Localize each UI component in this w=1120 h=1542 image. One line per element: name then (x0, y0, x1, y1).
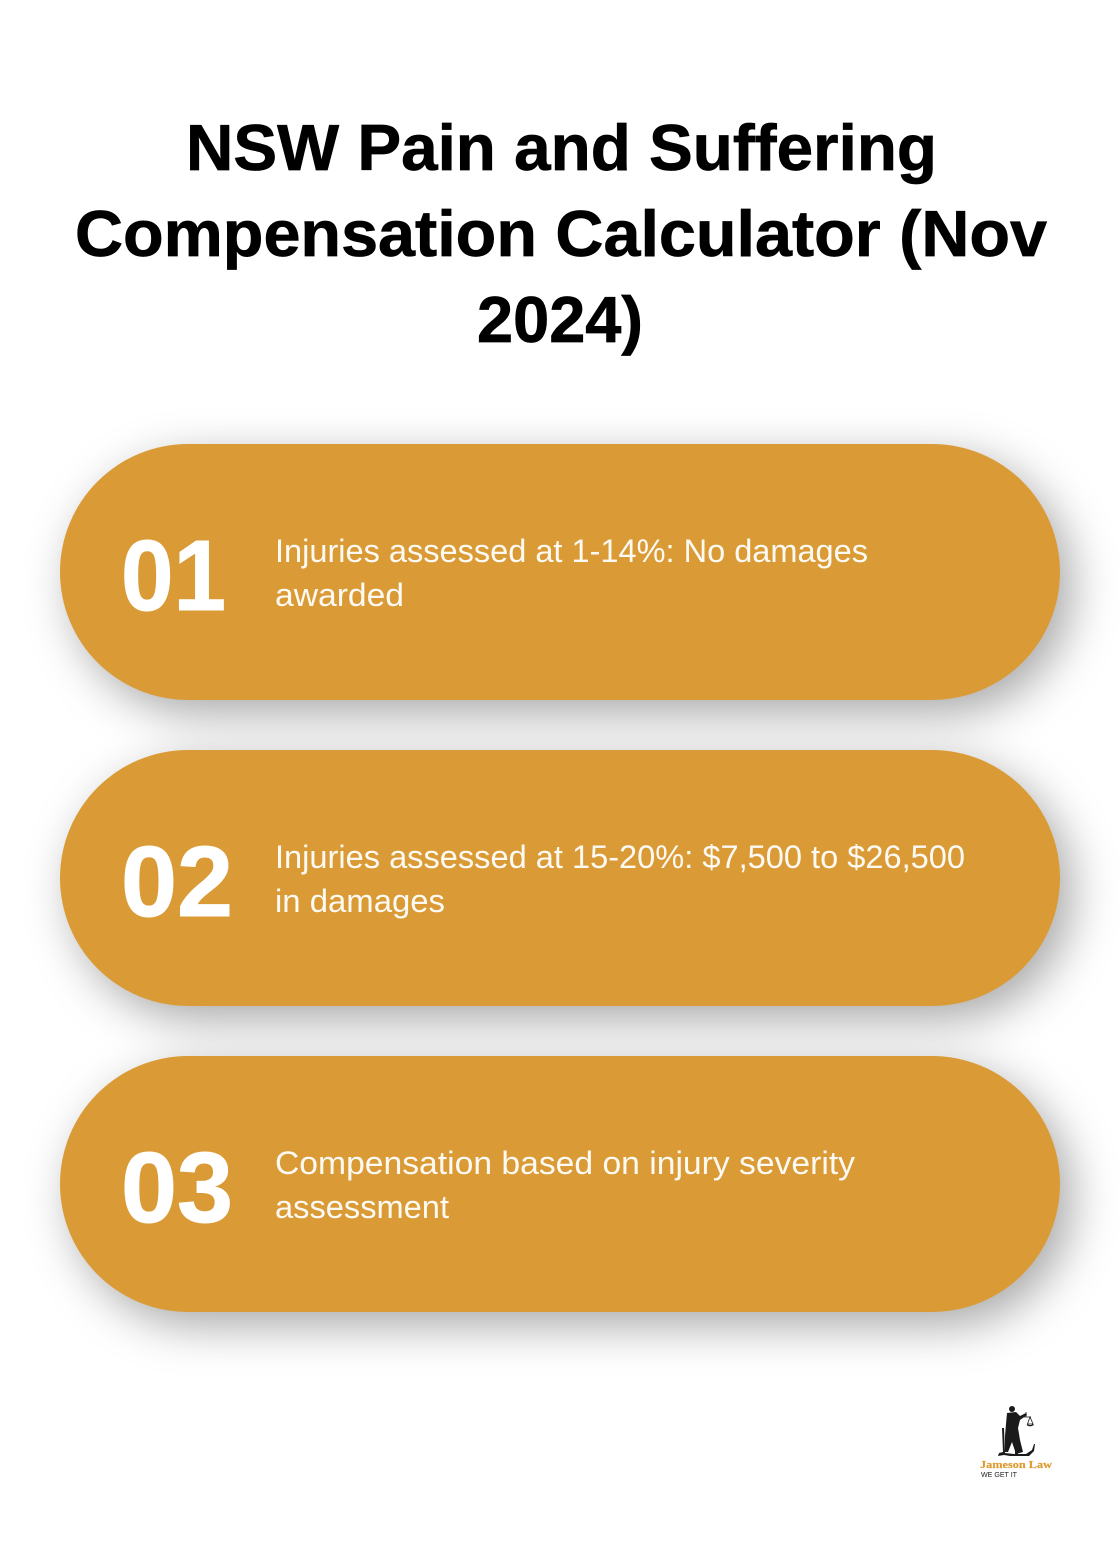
logo name: Jameson Law (980, 1459, 1052, 1471)
panel: step 3 pill (60, 1056, 1060, 1312)
step 2 number: 02 (121, 826, 233, 938)
title: 2024) (477, 283, 643, 356)
step 1 text (275, 533, 868, 613)
step 1 number: 01 (121, 520, 226, 632)
step 2 text: Injuries assessed at 15-20%: $7,500 to $26,500 (275, 839, 965, 875)
step 1 text: Injuries assessed at 1-14%: No damages (275, 533, 868, 569)
step 1 text: awarded (275, 577, 404, 613)
title: NSW Pain and Suffering (186, 111, 937, 184)
step 3 text: Compensation based on injury severity (275, 1145, 855, 1181)
step 3 text (275, 1145, 855, 1225)
icon: lady justice (998, 1406, 1035, 1456)
step 3 number: 03 (121, 1132, 233, 1244)
title (75, 111, 1047, 356)
panel: step 1 pill (60, 444, 1060, 700)
step 2 text: in damages (275, 883, 445, 919)
step 3 text: assessment (275, 1189, 449, 1225)
logo tagline: WE GET IT (981, 1472, 1018, 1479)
icon: scales (1022, 1412, 1034, 1426)
panel: step 2 pill (60, 750, 1060, 1006)
step 2 text (275, 839, 965, 919)
logo: Jameson Law (980, 1406, 1052, 1479)
title: Compensation Calculator (Nov (75, 197, 1047, 270)
